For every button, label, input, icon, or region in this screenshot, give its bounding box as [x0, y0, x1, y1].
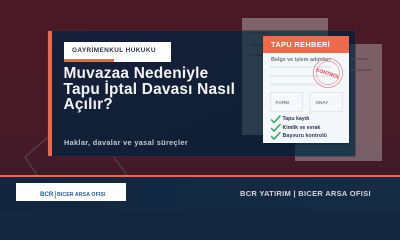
item: application: Başvuru kontrolü — [282, 132, 327, 138]
footer — [0, 177, 400, 210]
translucent sheet: back left — [242, 18, 328, 135]
footer accent line — [0, 175, 400, 177]
label underline — [64, 59, 114, 62]
placeholder lines — [270, 66, 332, 86]
panel: dark title panel — [48, 31, 355, 156]
item: identity: Kimlik ve evrak — [282, 124, 320, 130]
approval label: ONAY — [316, 100, 328, 105]
logo box — [16, 183, 126, 201]
card header — [263, 36, 349, 53]
item: deed record: Tapu kaydı — [282, 116, 309, 122]
form box — [270, 92, 303, 112]
footer text: BCR YATIRIM | BICER ARSA OFISI — [240, 189, 371, 198]
check icons — [271, 115, 281, 140]
stamp: KONTROL — [315, 67, 340, 81]
title — [64, 65, 235, 113]
logo mark: BCR — [40, 191, 53, 198]
panel: guide card — [263, 36, 349, 143]
sheet seen through panel: left — [242, 31, 328, 135]
logo divider — [54, 191, 56, 199]
subtitle: Haklar, davalar ve yasal süreçler — [64, 138, 188, 147]
stamp — [313, 58, 343, 88]
approval box — [309, 92, 343, 112]
category text: GAYRİMENKUL HUKUKU — [72, 46, 156, 54]
accent bar — [48, 31, 52, 156]
title: Açılır? — [64, 96, 113, 113]
card header text: TAPU REHBERİ — [271, 40, 330, 49]
title: Tapu İptal Davası Nasıl — [64, 81, 235, 98]
translucent sheet: back right — [295, 44, 382, 161]
checklist — [271, 115, 327, 140]
title: Muvazaa Nedeniyle — [64, 65, 208, 82]
logo name: BICER ARSA OFISI — [57, 192, 105, 198]
sheet seen through panel: right — [295, 44, 355, 156]
category label — [64, 42, 171, 62]
card subtitle: Belge ve işlem adımları — [271, 57, 331, 63]
form label: FORM — [276, 100, 289, 105]
